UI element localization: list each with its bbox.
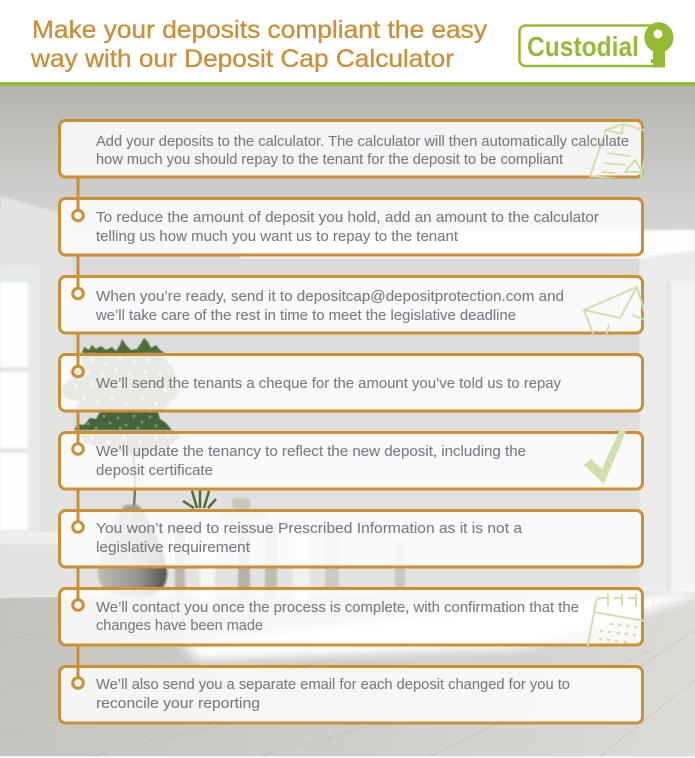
step 7 text: [96, 600, 579, 634]
step 1: [60, 120, 650, 181]
step 2 text: To reduce the amount of deposit you hold, add an amount to the calculator: [96, 210, 599, 226]
step 2: [60, 198, 642, 255]
icon: calendar: [586, 594, 644, 646]
step 1 text: how much you should repay to the tenant for the deposit to be compliant: [96, 152, 563, 168]
step 7 text: We’ll contact you once the process is complete, with confirmation that the: [96, 600, 579, 616]
title: [30, 16, 488, 73]
step 7: [60, 588, 650, 650]
step 5 text: [96, 444, 526, 479]
table: [175, 498, 405, 602]
step 4: [60, 354, 642, 411]
floor: [0, 590, 695, 756]
side wall left: [0, 196, 72, 598]
title: Make your deposits compliant the easy: [32, 16, 488, 44]
step 5 text: We’ll update the tenancy to reflect the new deposit, including the: [96, 444, 526, 460]
step 2 text: [96, 210, 599, 245]
left window: [0, 266, 60, 544]
foliage: [60, 338, 180, 458]
bottom strip: [0, 756, 695, 758]
step 6: [60, 510, 642, 567]
step 2 text: telling us how much you want us to repay to the tenant: [96, 229, 458, 245]
potted tree: [60, 338, 405, 602]
step 8 text: reconcile your reporting: [96, 696, 260, 712]
icon: check mark: [584, 431, 626, 484]
small plant: [183, 488, 216, 508]
icon: key: [644, 22, 673, 68]
right wall and window: [240, 230, 695, 592]
title: way with our Deposit Cap Calculator: [30, 45, 454, 73]
timeline connector: [73, 178, 83, 688]
step 3 text: When you’re ready, send it to depositcap@depositprotection.com and: [96, 289, 564, 305]
step 6 text: legislative requirement: [96, 540, 250, 556]
logo: Custodial: [520, 22, 673, 68]
sunlight on floor: [180, 591, 695, 660]
step 6 text: You won’t need to reissue Prescribed Information as it is not a: [96, 521, 523, 537]
logo: Custodial: Custodial: [527, 31, 639, 62]
step 3: [60, 276, 650, 336]
step 4 text: We’ll send the tenants a cheque for the amount you’ve told us to repay: [96, 376, 562, 392]
header band: [0, 0, 695, 82]
step 8: [60, 666, 642, 723]
step 8 text: We’ll also send you a separate email for each deposit changed for you to: [96, 677, 570, 693]
icon: envelope: [584, 287, 650, 336]
vase: [98, 505, 167, 596]
floor boards: [0, 600, 695, 756]
step 5 text: deposit certificate: [96, 463, 213, 479]
header green rule: [0, 82, 695, 86]
step 3 text: [95, 289, 564, 324]
step 5: [60, 431, 642, 489]
step 3 text: we’ll take care of the rest in time to meet the legislative deadline: [95, 308, 516, 324]
step 8 text: [96, 677, 570, 712]
step 7 text: changes have been made: [96, 618, 263, 634]
icon: document: [588, 123, 644, 178]
step 1 text: Add your deposits to the calculator. The calculator will then automatically calculate: [96, 134, 629, 150]
step 6 text: [96, 521, 523, 556]
step 1 text: [96, 134, 629, 168]
